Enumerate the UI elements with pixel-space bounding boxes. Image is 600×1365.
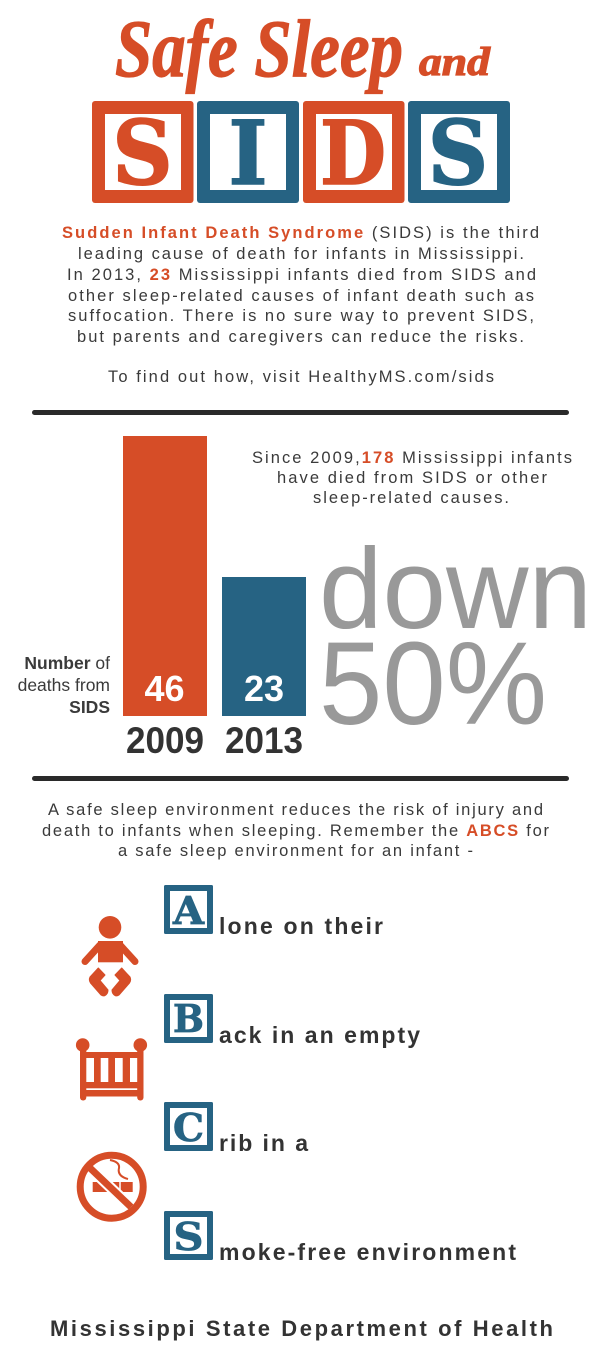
letter blocks: SIDS xyxy=(92,101,510,205)
title script: Safe Sleep and: and xyxy=(419,39,491,84)
intro text: To find out how, visit HealthyMS.com/sids xyxy=(108,368,494,386)
bar values: 23 xyxy=(244,668,284,709)
item: C xyxy=(164,1102,308,1156)
bar chart: deaths from SIDS xyxy=(18,436,306,761)
axis label: Number of xyxy=(24,653,110,673)
since 2009 text: sleep-related causes. xyxy=(313,489,509,507)
callout: down 50%: down xyxy=(319,526,592,653)
ABCS intro text: death to infants when sleeping. Remember the ABCS for xyxy=(42,822,550,840)
letter blocks: SIDS: I xyxy=(228,101,268,205)
axis label: deaths from xyxy=(18,675,110,695)
item: S xyxy=(164,1211,516,1265)
icon: crib xyxy=(76,1038,147,1100)
bar 2013 xyxy=(222,577,306,716)
item: B: B xyxy=(173,996,204,1041)
axis label: SIDS xyxy=(69,697,110,717)
intro text: Sudden Infant Death Syndrome (SIDS) is the third xyxy=(62,224,539,242)
bar 2009 xyxy=(123,436,207,716)
letter blocks: SIDS: S xyxy=(428,101,488,205)
bar values xyxy=(144,668,284,709)
ABCS intro text: a safe sleep environment for an infant - xyxy=(118,842,473,860)
callout: down 50%: 50% xyxy=(319,618,547,750)
intro text: leading cause of death for infants in Mississippi. xyxy=(78,245,524,263)
icon: baby xyxy=(85,916,135,996)
item: S: moke-free environment xyxy=(219,1239,516,1265)
ABCS intro text: A safe sleep environment reduces the risk of injury and xyxy=(48,801,543,819)
intro text: suffocation. There is no sure way to prevent SIDS, xyxy=(68,307,534,325)
axis label xyxy=(18,653,110,717)
item: A xyxy=(164,885,383,939)
intro text: In 2013, 23 Mississippi infants died from SIDS and xyxy=(67,266,536,284)
since 2009 text: have died from SIDS or other xyxy=(277,469,548,487)
item: B: ack in an empty xyxy=(219,1022,420,1048)
letter blocks: SIDS: S xyxy=(112,101,172,205)
intro text xyxy=(62,224,539,386)
item: A: A xyxy=(172,888,205,933)
since 2009 text: Since 2009,178 Mississippi infants xyxy=(252,449,572,467)
since 2009 text xyxy=(252,449,572,507)
intro text: but parents and caregivers can reduce the risks. xyxy=(77,328,524,346)
ABCS intro text xyxy=(42,801,550,860)
bar year labels: 2009 xyxy=(126,720,204,761)
item: B xyxy=(164,994,420,1048)
bar year labels xyxy=(126,720,303,761)
item: A: lone on their xyxy=(219,913,383,939)
bar values: 46 xyxy=(144,668,185,709)
item: C: rib in a xyxy=(219,1130,308,1156)
footer: Mississippi State Department of Health xyxy=(50,1316,553,1341)
title xyxy=(92,3,510,205)
item: S: S xyxy=(174,1214,204,1259)
callout: down 50% xyxy=(319,526,592,750)
title script: Safe Sleep and: Safe Sleep xyxy=(115,3,403,94)
intro text: other sleep-related causes of infant death such as xyxy=(68,287,534,305)
item: C: C xyxy=(173,1105,204,1150)
letter blocks: SIDS: D xyxy=(320,101,386,205)
icon: no smoking xyxy=(80,1155,143,1218)
bar year labels: 2013 xyxy=(225,720,303,761)
